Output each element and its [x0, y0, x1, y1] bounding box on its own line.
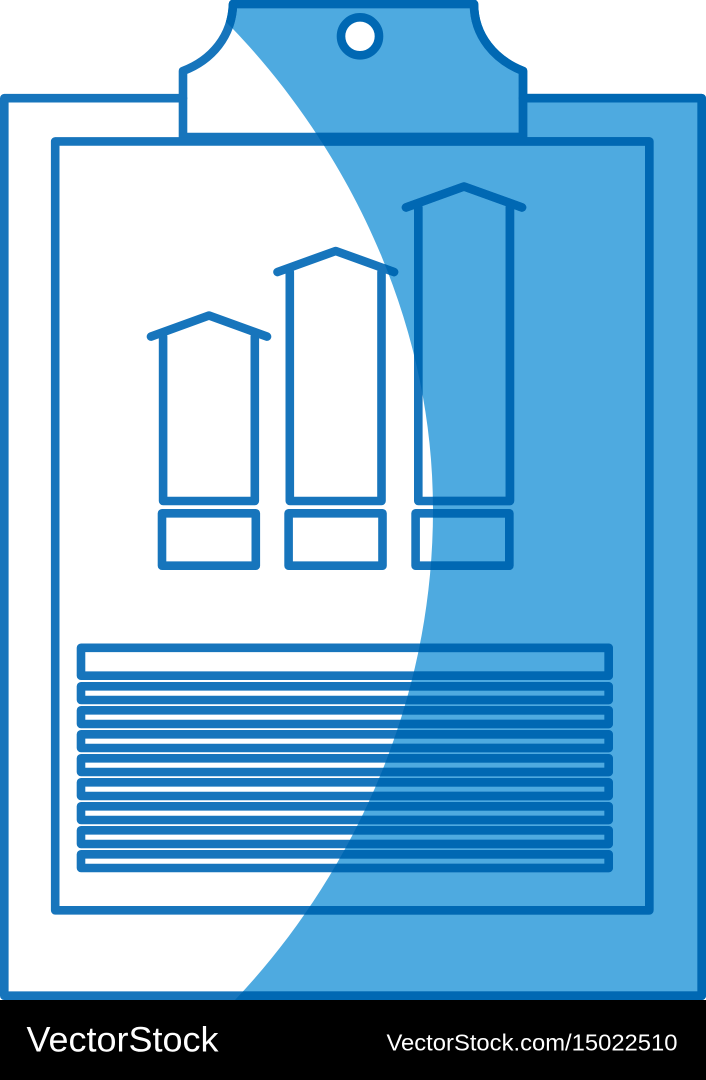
- base box 3: [416, 513, 509, 566]
- text line 5: [81, 782, 609, 796]
- text line 3: [81, 734, 609, 748]
- arrow bar 1: [151, 316, 267, 501]
- clipboard clip: [183, 4, 523, 137]
- base box 2: [289, 513, 382, 566]
- text line 7: [81, 830, 609, 844]
- darker line art over the shadow: [226, 0, 706, 1000]
- heading text bar: [81, 648, 609, 676]
- text line 6: [81, 806, 609, 820]
- text line 1: [81, 686, 609, 700]
- paper sheet: [55, 141, 649, 910]
- clip hole: [341, 17, 379, 55]
- watermark bar: [0, 1000, 706, 1080]
- watermark url: VectorStock.com/15022510: [386, 1030, 678, 1056]
- watermark logo: VectorStock: [26, 1020, 219, 1060]
- blue shadow area: [233, 4, 702, 1000]
- arrow bar 2: [278, 251, 394, 501]
- text line 2: [81, 710, 609, 724]
- base box 1: [162, 513, 256, 566]
- arrow bar 3: [406, 186, 522, 501]
- text line 8: [81, 854, 609, 868]
- text line 4: [81, 758, 609, 772]
